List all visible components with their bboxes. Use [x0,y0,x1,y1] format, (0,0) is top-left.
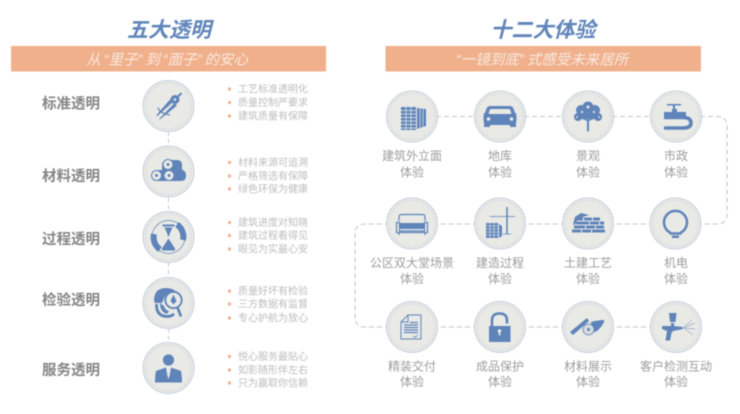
label: 检验透明 [42,291,100,309]
bullet list: 建筑质量有保障 [238,110,308,122]
right subtitle banner: “一镜到底”式感受未来居所 [456,52,631,68]
caption [488,148,512,180]
item: construction process [474,198,526,286]
caption: 公区双大堂场景 [370,256,454,270]
icon: compass [143,80,194,132]
item: garage [474,91,526,180]
caption: 体验 [400,374,424,389]
caption: 体验 [488,164,512,180]
caption: 精装交付 [388,358,436,374]
icon: saw and chainsaw [562,302,614,352]
icon: document [386,302,438,352]
caption: 体验 [664,271,688,286]
caption [476,255,524,286]
left subtitle banner [11,46,326,72]
bullet list: 悦心服务最贴心 [238,350,308,363]
icon: light bulb [650,198,701,249]
caption: 景观 [576,149,600,163]
caption: 材料展示 [564,360,612,374]
icon: logs [143,146,194,197]
icon: hourglass [143,212,194,262]
item: lobby [370,198,454,286]
caption [564,360,612,389]
icon: helmet and magnifier [143,278,194,328]
bullet list [228,216,308,256]
item: facade [382,91,442,180]
row: process transparency [42,212,308,262]
caption: 地库 [488,148,512,163]
bullet list: 如影随形伴左右 [238,364,308,376]
bullet list: 质量控制严要求 [238,96,308,109]
caption: 机电 [664,256,688,270]
caption [476,360,524,389]
bullet list: 三方数据有监督 [238,298,308,310]
dashed route connector [355,116,727,327]
caption: 体验 [576,271,600,286]
item: municipal [650,91,702,180]
bullet list: 工艺标准透明化 [238,82,308,96]
caption [382,148,442,180]
bullet list [228,350,308,390]
bullet list: 质量好坏有检验 [238,284,308,298]
icon: building facade [386,91,438,142]
caption: 体验 [400,271,424,286]
bullet list: 专心护航为放心 [238,312,308,324]
item: electromechanical [650,198,701,286]
panel: twelve experiences [355,18,727,389]
timeline connector [168,132,170,342]
icon: spray gun [650,302,702,352]
label: 服务透明 [42,361,100,379]
caption: 成品保护 [476,360,524,374]
caption: 体验 [576,164,600,180]
caption: 建筑外立面 [382,148,442,163]
icon: padlock [474,302,526,352]
row: material transparency [42,146,308,197]
item: product protection [474,302,526,389]
bullet list: 材料来源可追溯 [238,156,308,169]
icon: sofa [386,198,438,249]
bullet list: 严格筛选有保障 [238,170,308,182]
caption: 体验 [488,271,512,286]
icon: person in suit [143,342,194,394]
label: 材料透明 [42,168,100,185]
item: customer test interaction [640,302,712,389]
row: inspection transparency [42,278,308,328]
item: fit-out delivery [386,302,438,389]
bullet list: 眼见为实最心安 [238,242,308,256]
bullet list: 只为赢取你信赖 [238,376,308,390]
bullet list: 绿色环保为健康 [238,182,308,196]
icon: brick wall [562,198,614,249]
caption: 土建工艺 [564,256,612,270]
left title: 五大透明 [127,19,215,42]
icon: tree [562,91,614,142]
caption: 建造过程 [476,255,524,270]
right title: 十二大体验 [490,18,598,42]
icon: pipe and tap [650,91,702,142]
caption [388,358,436,389]
caption: 体验 [488,374,512,389]
caption [664,148,688,180]
caption: 市政 [664,148,688,163]
item: civil works [562,198,614,286]
caption [564,256,612,286]
bullet list: 建筑过程看得见 [238,229,308,242]
caption [370,256,454,286]
item: material display [562,302,614,389]
caption [664,256,688,286]
bullet list: 建筑进度对知晓 [238,216,308,229]
label: 过程透明 [42,231,100,248]
caption: 体验 [576,374,600,389]
bullet list [228,156,308,196]
panel: five transparencies [11,19,326,394]
row: service transparency [42,342,308,394]
caption [576,149,600,180]
label: 标准透明 [42,96,100,112]
caption [640,358,712,389]
right subtitle banner [386,46,701,72]
item: landscape [562,91,614,180]
bullet list [228,82,308,122]
left subtitle banner: 从“里子”到“面子”的安心 [86,52,248,68]
icon: crane and building [474,198,526,249]
caption: 体验 [664,164,688,180]
row: standard transparency [42,80,308,132]
caption: 客户检测互动 [640,358,712,374]
icon: car [474,91,526,142]
caption: 体验 [664,374,688,389]
caption: 体验 [400,164,424,180]
bullet list [228,284,308,324]
